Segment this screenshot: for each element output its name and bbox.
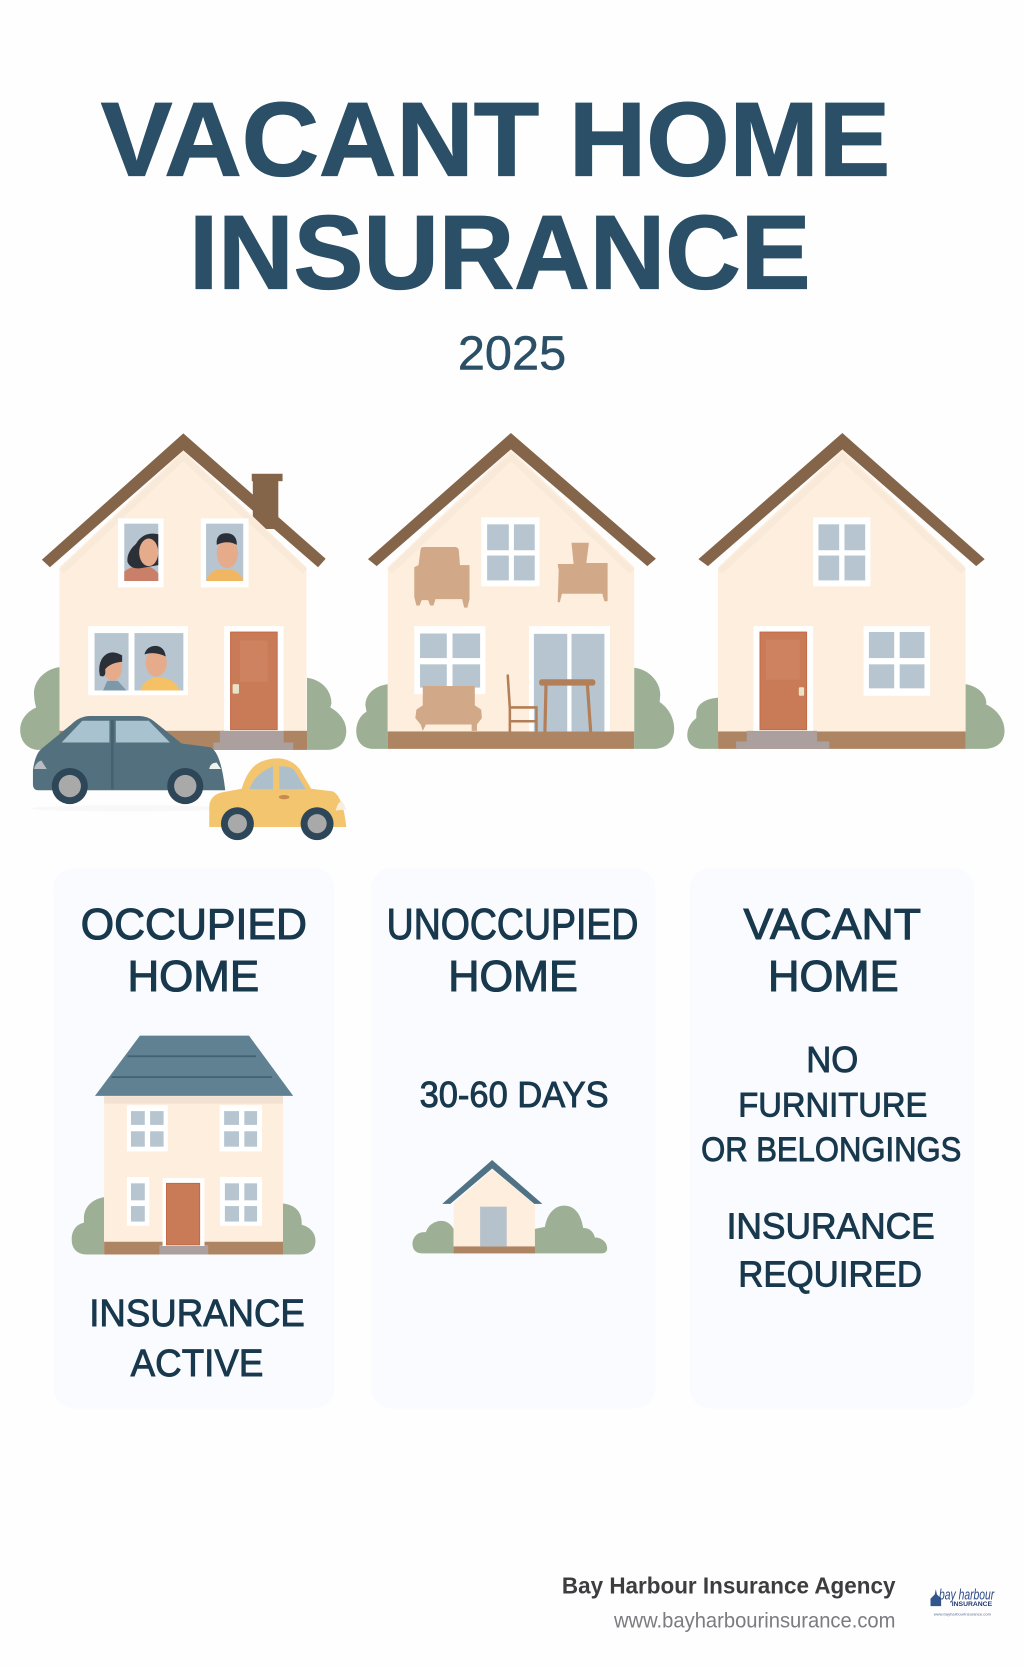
- note: insurance required: REQUIRED: [738, 1253, 922, 1294]
- status: insurance active: ACTIVE: [131, 1342, 263, 1385]
- icon: wooden chair: [508, 676, 536, 731]
- heading: occupied home: OCCUPIED: [81, 901, 307, 949]
- front door: [224, 626, 284, 731]
- icon: wooden table: [539, 679, 595, 731]
- heading: vacant home: [744, 901, 921, 1001]
- note: no furniture or belongings: OR BELONGINGS: [701, 1131, 961, 1169]
- panel: unoccupied home: [371, 868, 655, 1409]
- upper window: [813, 517, 871, 586]
- status: insurance active: [89, 1292, 305, 1385]
- footer: agency name and website: [562, 1572, 895, 1632]
- icon: yellow car: [209, 758, 346, 840]
- note: insurance required: INSURANCE: [727, 1206, 935, 1247]
- heading: vacant home: HOME: [768, 953, 899, 1001]
- subtitle: year: 2025: [458, 328, 566, 381]
- lower window: [864, 626, 930, 696]
- illustration: vacant house: [687, 433, 1005, 749]
- duration: 30-60 days: 30-60 DAYS: [420, 1074, 609, 1115]
- note: no furniture or belongings: [701, 1039, 961, 1169]
- illustration: occupied house with people and cars: [20, 433, 346, 840]
- note: insurance required: [727, 1206, 935, 1294]
- illustration: small house with blue roof: [72, 1036, 315, 1254]
- title: [101, 81, 890, 311]
- illustration: unoccupied house with furniture: [356, 433, 674, 749]
- icon: armchair: [414, 547, 470, 608]
- panel: occupied home: [53, 868, 335, 1409]
- upper window: [481, 517, 540, 586]
- front door: [753, 626, 813, 731]
- footer: agency name and website: Bay Harbour Insurance Agency: [562, 1572, 895, 1598]
- window: woman upstairs: [118, 518, 164, 587]
- icon: dresser with lamp: [558, 543, 608, 602]
- windows: [127, 1105, 262, 1226]
- door: [163, 1178, 204, 1246]
- note: no furniture or belongings: NO: [806, 1039, 858, 1080]
- logo: bay harbour insurance: www.bayharbourinsurance.com: [934, 1613, 991, 1617]
- logo: bay harbour insurance: INSURANCE: [952, 1601, 992, 1608]
- title: VACANT HOME: [101, 81, 890, 198]
- heading: unoccupied home: UNOCCUPIED: [387, 901, 638, 949]
- logo: bay harbour insurance: bay harbour: [939, 1588, 995, 1604]
- icon: bench seat: [415, 686, 482, 731]
- window: couple downstairs: [88, 626, 188, 695]
- heading: unoccupied home: [387, 901, 638, 1001]
- panel: vacant home: [689, 868, 974, 1409]
- illustration: small cottage: [412, 1160, 607, 1253]
- heading: occupied home: HOME: [127, 953, 259, 1001]
- status: insurance active: INSURANCE: [89, 1292, 305, 1335]
- patio door: [529, 626, 610, 732]
- note: no furniture or belongings: FURNITURE: [738, 1086, 927, 1124]
- title: INSURANCE: [189, 194, 810, 311]
- logo: bay harbour insurance: [931, 1588, 995, 1617]
- heading: unoccupied home: HOME: [448, 953, 578, 1001]
- footer: agency name and website: www.bayharbourinsurance.com: [613, 1608, 895, 1632]
- heading: occupied home: [81, 901, 307, 1001]
- window: man upstairs: [201, 518, 249, 587]
- icon: blue car: [31, 716, 226, 812]
- heading: vacant home: VACANT: [744, 901, 921, 949]
- lower window: [414, 626, 485, 694]
